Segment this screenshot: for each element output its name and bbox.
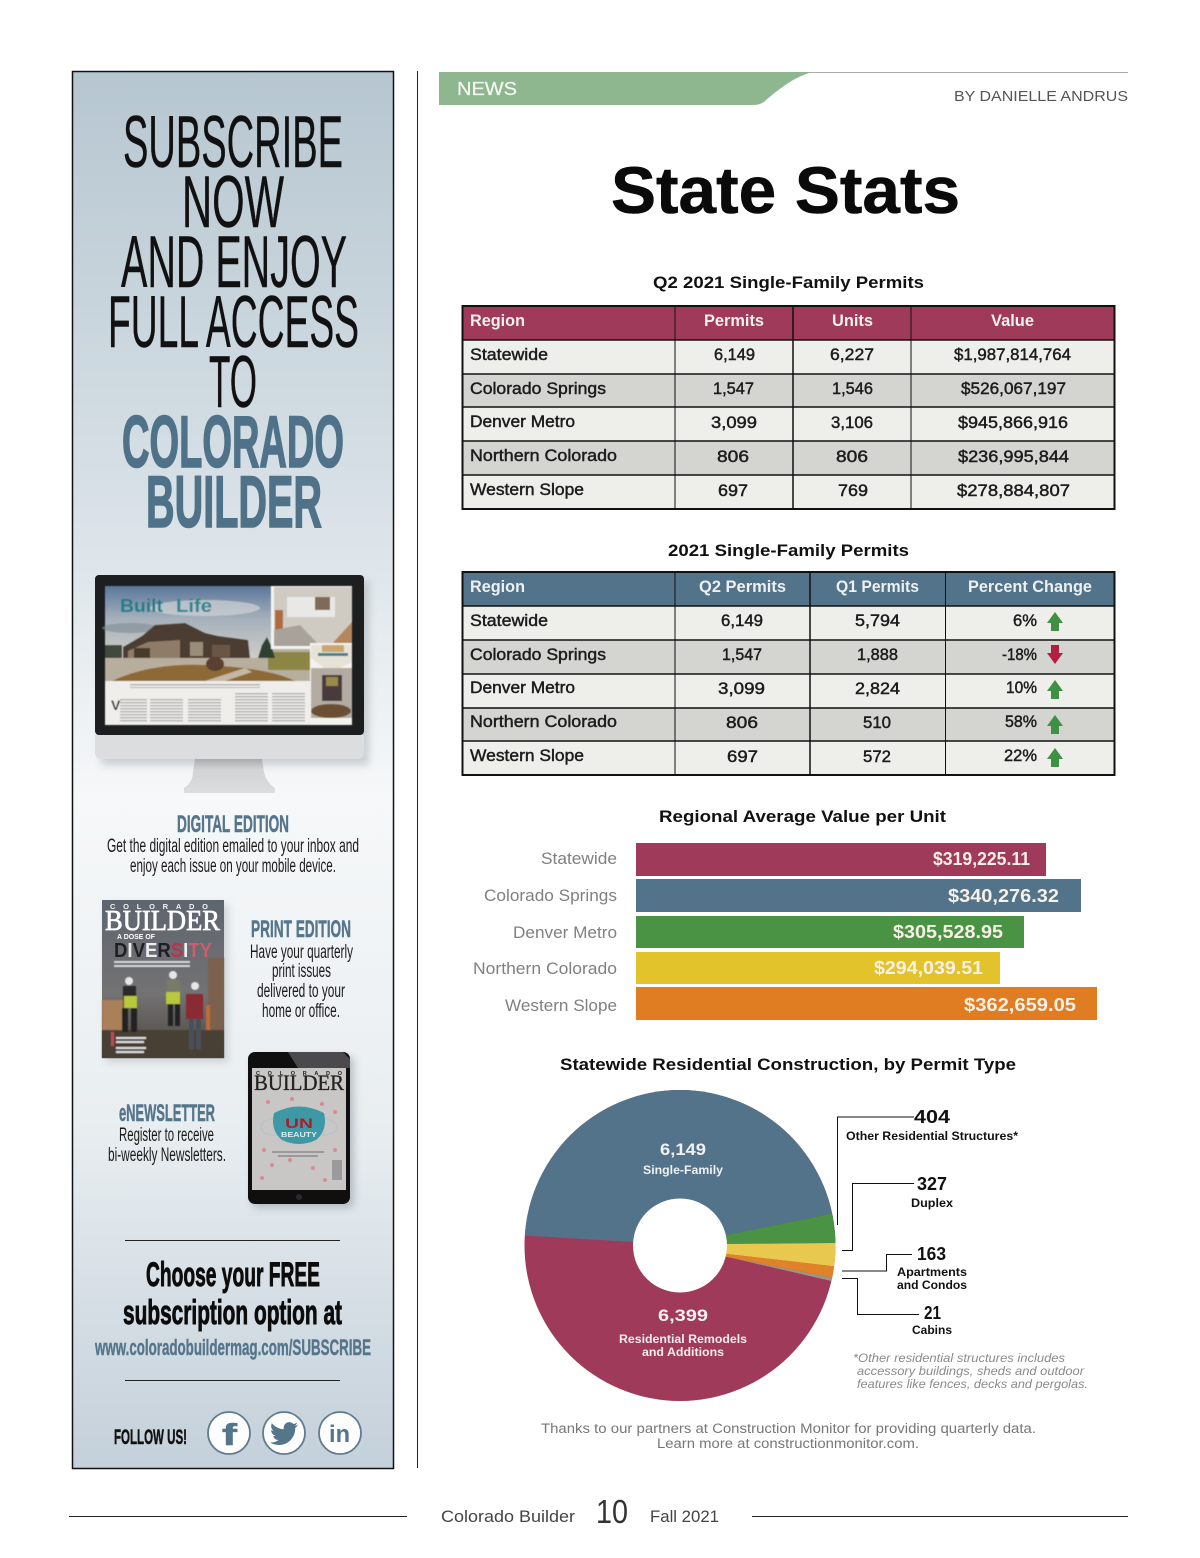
text: free subscription call to action: Choose your FREE	[146, 1256, 320, 1294]
credit text: Learn more at constructionmonitor.com.	[657, 1436, 919, 1451]
panel: subscription advertisement	[72, 72, 394, 1468]
callout: other residential structures	[838, 1107, 1018, 1225]
icon: desktop monitor with magazine: Built	[120, 596, 163, 616]
table: Q2 2021 single-family permits: Permits	[704, 312, 764, 330]
icon: linkedin	[319, 1412, 361, 1454]
icon: up arrow	[1047, 748, 1063, 767]
text: enewsletter	[108, 1100, 226, 1166]
icon: tablet with magazine: BEAUTY	[281, 1132, 317, 1139]
slice label: residential remodels: 6,399	[658, 1306, 708, 1325]
table: Q2 2021 single-family permits	[462, 273, 1115, 509]
icon: up arrow	[1047, 715, 1063, 734]
table title: Q2 2021 Single-Family Permits	[653, 273, 924, 292]
callout: apartments and condos	[842, 1244, 967, 1292]
credit text	[541, 1421, 1036, 1451]
text: enewsletter: Register to receive	[119, 1125, 214, 1146]
footnote	[853, 1351, 1088, 1391]
table: Q2 2021 single-family permits: 806	[717, 448, 749, 466]
table: 2021 single-family permits: 2,824	[855, 680, 900, 698]
icon: desktop monitor with magazine: V	[111, 697, 121, 713]
callout: duplex: Duplex	[911, 1196, 953, 1210]
table: Q2 2021 single-family permits: $236,995,844	[958, 448, 1069, 466]
title: State Stats	[611, 153, 960, 227]
table: Q2 2021 single-family permits: $1,987,814,764	[954, 346, 1071, 364]
bar chart: regional average value per unit: Denver Metro	[513, 924, 617, 942]
table: 2021 single-family permits: Western Slope	[470, 747, 584, 765]
table: Q2 2021 single-family permits: Northern Colorado	[470, 447, 617, 465]
image: print magazine cover	[102, 900, 228, 1062]
callout: cabins: Cabins	[912, 1323, 952, 1337]
table: Q2 2021 single-family permits: 806	[836, 448, 868, 466]
slice label: single-family	[643, 1140, 723, 1177]
table: 2021 single-family permits: Northern Colorado	[470, 713, 617, 731]
table: Q2 2021 single-family permits: 697	[718, 482, 748, 500]
text: print edition: home or office.	[262, 1001, 340, 1022]
headline: subscribe now	[108, 102, 359, 543]
slice label: single-family: Single-Family	[643, 1163, 723, 1177]
table: 2021 single-family permits	[462, 541, 1115, 775]
table: Q2 2021 single-family permits: 1,546	[832, 380, 873, 398]
text: free subscription call to action: www.coloradobuildermag.com/SUBSCRIBE	[94, 1335, 371, 1360]
bar chart: regional average value per unit: Colorado Springs	[484, 887, 617, 905]
text: print edition	[250, 916, 353, 1022]
table: 2021 single-family permits: 5,794	[855, 612, 900, 630]
headline: subscribe now: COLORADO	[122, 402, 344, 483]
slice label: residential remodels: and Additions	[642, 1345, 724, 1359]
text: free subscription call to action	[94, 1256, 371, 1360]
table: Q2 2021 single-family permits: Western Slope	[470, 481, 584, 499]
table: 2021 single-family permits: 697	[727, 748, 758, 766]
headline: subscribe now: SUBSCRIBE	[123, 102, 343, 183]
table: Q2 2021 single-family permits: $945,866,916	[958, 414, 1068, 432]
table: Q2 2021 single-family permits: Denver Metro	[470, 413, 575, 431]
text: enewsletter: bi-weekly Newsletters.	[108, 1145, 226, 1166]
donut slices	[524, 1090, 836, 1401]
table: 2021 single-family permits: Denver Metro	[470, 679, 575, 697]
bar chart: regional average value per unit: $340,276.32	[948, 886, 1059, 906]
text: print edition: Have your quarterly	[250, 942, 353, 963]
table title: 2021 Single-Family Permits	[668, 541, 909, 560]
slice label: residential remodels	[619, 1306, 747, 1359]
icon: down arrow	[1047, 645, 1063, 664]
bar chart: regional average value per unit: $294,039.51	[874, 958, 983, 978]
bar chart: regional average value per unit	[473, 807, 1097, 1020]
text: print edition: PRINT EDITION	[251, 916, 351, 943]
headline: subscribe now: TO	[209, 342, 257, 423]
table: 2021 single-family permits: 3,099	[718, 680, 765, 698]
callout: duplex: 327	[917, 1174, 947, 1194]
headline: subscribe now: NOW	[182, 162, 284, 243]
headline: subscribe now: AND ENJOY	[121, 222, 347, 303]
table: Q2 2021 single-family permits: Region	[470, 312, 525, 330]
text: print edition: delivered to your	[257, 981, 345, 1002]
icon: facebook	[208, 1412, 250, 1454]
icon: up arrow	[1047, 612, 1063, 631]
table: Q2 2021 single-family permits: 769	[838, 482, 868, 500]
icon: up arrow	[1047, 680, 1063, 699]
icon: tablet with magazine: COLORADO	[256, 1071, 343, 1077]
callout: other residential structures: Other Residential Structures*	[846, 1129, 1018, 1143]
table: 2021 single-family permits: Region	[470, 578, 525, 596]
table: 2021 single-family permits: 10%	[1006, 679, 1037, 697]
chart title: Regional Average Value per Unit	[659, 807, 946, 826]
table: 2021 single-family permits: Statewide	[470, 612, 548, 630]
footer	[69, 1493, 1128, 1530]
table: Q2 2021 single-family permits: 6,227	[830, 346, 874, 364]
image: print magazine cover: DIVERSITY	[114, 940, 213, 962]
table: 2021 single-family permits: Q2 Permits	[699, 578, 786, 596]
callout: apartments and condos: and Condos	[897, 1278, 967, 1292]
image: print magazine cover: BUILDER	[105, 905, 221, 937]
icon: desktop monitor with magazine	[95, 575, 369, 793]
icon: twitter	[263, 1412, 305, 1454]
footer: Colorado Builder	[441, 1508, 576, 1526]
footer: 10	[596, 1493, 628, 1530]
bar chart: regional average value per unit: Northern Colorado	[473, 960, 617, 978]
text: print edition: print issues	[272, 961, 331, 982]
credit text: Thanks to our partners at Construction Monitor for providing quarterly data.	[541, 1421, 1036, 1436]
table: 2021 single-family permits: 1,547	[722, 646, 762, 664]
slice label: residential remodels: Residential Remodels	[619, 1332, 747, 1346]
chart title: Statewide Residential Construction, by Permit Type	[560, 1055, 1016, 1074]
header: news tab: NEWS	[457, 78, 517, 99]
callout: cabins	[842, 1278, 952, 1337]
header: news tab	[439, 72, 1128, 105]
bar chart: regional average value per unit: $319,225.11	[933, 849, 1030, 869]
text: digital edition: Get the digital edition emailed to your inbox and	[107, 836, 359, 857]
callout: cabins: 21	[924, 1303, 941, 1323]
table: 2021 single-family permits: Percent Change	[968, 578, 1092, 596]
text: enewsletter: eNEWSLETTER	[119, 1100, 215, 1127]
table: 2021 single-family permits: 6,149	[721, 612, 763, 630]
table: Q2 2021 single-family permits: 3,099	[711, 414, 757, 432]
table: Q2 2021 single-family permits: $526,067,197	[961, 380, 1066, 398]
table: 2021 single-family permits: 22%	[1004, 747, 1037, 765]
icon: tablet with magazine: BUILDER	[254, 1070, 344, 1095]
table: 2021 single-family permits: 806	[726, 714, 758, 732]
donut chart: statewide residential construction by permit type	[500, 1055, 1088, 1405]
bar chart: regional average value per unit: Western Slope	[505, 997, 617, 1015]
callout: other residential structures: 404	[914, 1107, 950, 1127]
headline: subscribe now: FULL ACCESS	[108, 282, 359, 363]
table: 2021 single-family permits: -18%	[1002, 646, 1037, 664]
table: 2021 single-family permits: 58%	[1005, 713, 1037, 731]
headline: subscribe now: BUILDER	[146, 462, 322, 543]
footnote: accessory buildings, sheds and outdoor	[857, 1364, 1085, 1378]
table: 2021 single-family permits: 572	[863, 748, 891, 766]
footnote: features like fences, decks and pergolas.	[857, 1377, 1088, 1391]
text: free subscription call to action: subscription option at	[123, 1294, 342, 1332]
bar chart: regional average value per unit: Statewide	[541, 850, 617, 868]
table: Q2 2021 single-family permits: $278,884,807	[957, 482, 1070, 500]
callout: duplex	[842, 1174, 953, 1250]
table: 2021 single-family permits: 6%	[1013, 612, 1037, 630]
callout: apartments and condos: Apartments	[897, 1265, 967, 1279]
table: Q2 2021 single-family permits: Statewide	[470, 346, 548, 364]
icon: desktop monitor with magazine: Life	[176, 596, 212, 616]
slice label: single-family: 6,149	[660, 1140, 706, 1159]
text: digital edition: DIGITAL EDITION	[177, 811, 289, 838]
icon: linkedin: in	[329, 1421, 350, 1448]
byline: BY DANIELLE ANDRUS	[954, 88, 1128, 105]
image: print magazine cover: COLORADO	[110, 902, 208, 911]
icon: tablet with magazine	[248, 1052, 354, 1208]
text: follow us: FOLLOW US!	[114, 1426, 187, 1449]
bar chart: regional average value per unit: $305,528.95	[893, 922, 1003, 942]
icon: tablet with magazine: UN	[285, 1115, 313, 1131]
table: Q2 2021 single-family permits: Units	[832, 312, 873, 330]
image: print magazine cover: A DOSE OF	[117, 932, 155, 941]
icon: facebook: f	[222, 1417, 238, 1452]
footer: Fall 2021	[650, 1508, 719, 1526]
table: Q2 2021 single-family permits: Value	[991, 312, 1034, 330]
table: Q2 2021 single-family permits: 3,106	[831, 414, 873, 432]
footnote: *Other residential structures includes	[853, 1351, 1065, 1365]
table: 2021 single-family permits: 510	[863, 714, 891, 732]
table: 2021 single-family permits: Colorado Springs	[470, 646, 606, 664]
table: Q2 2021 single-family permits: Colorado Springs	[470, 380, 606, 398]
table: Q2 2021 single-family permits: 6,149	[714, 346, 755, 364]
callout: apartments and condos: 163	[917, 1244, 946, 1264]
bar chart: regional average value per unit: $362,659.05	[964, 995, 1076, 1015]
text: digital edition: enjoy each issue on your mobile device.	[130, 856, 336, 877]
table: Q2 2021 single-family permits: 1,547	[713, 380, 754, 398]
table: 2021 single-family permits: Q1 Permits	[836, 578, 919, 596]
table: 2021 single-family permits: 1,888	[857, 646, 898, 664]
text: digital edition	[107, 811, 359, 877]
